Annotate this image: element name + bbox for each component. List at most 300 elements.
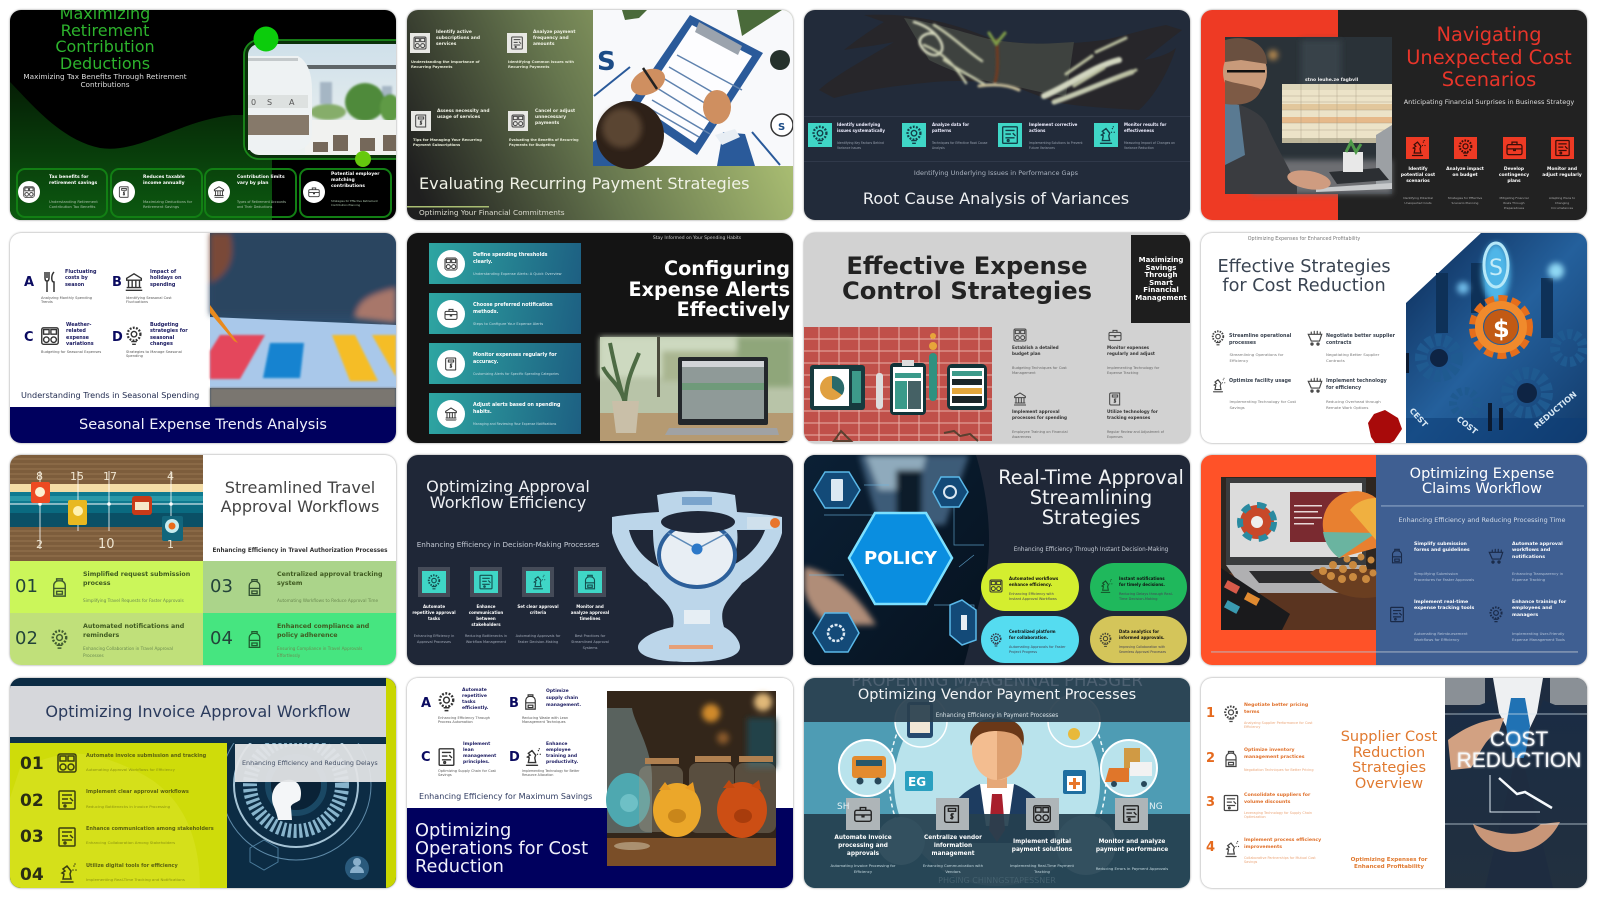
note: Management Techniques — [522, 720, 566, 724]
note — [1244, 811, 1312, 820]
illustration: gears and dollar sign: COST — [1455, 414, 1480, 437]
note — [143, 200, 192, 209]
heading: Adjust alerts based on spending — [473, 402, 560, 408]
icon: gear bulb — [1486, 605, 1506, 624]
subtitle: Enhancing Efficiency and Reducing Delays — [242, 759, 378, 767]
heading — [837, 122, 885, 133]
heading: Centralized approval tracking — [277, 570, 383, 578]
note: Enhancing Communication with — [923, 863, 983, 868]
note — [1499, 196, 1529, 210]
illustration: timeline on wood — [10, 455, 396, 665]
note: Streamlining Operations for — [1230, 352, 1283, 357]
photo: savings jar with coins in green frame — [10, 26, 396, 220]
illustration: trophy with clock — [407, 455, 793, 665]
number 03: 03 — [210, 576, 233, 597]
note — [1512, 631, 1565, 643]
note — [331, 199, 378, 207]
icon: briefcase — [303, 181, 325, 203]
photo: person reviewing clipboard — [407, 10, 793, 208]
letter D: D — [509, 750, 520, 765]
note: Negotiation Techniques for Better Pricing — [1244, 768, 1313, 772]
icon: building — [38, 325, 62, 347]
title: Reduction — [415, 856, 504, 877]
note: Optimizing Supply Chain for Cost — [438, 769, 496, 773]
heading: processes for spending — [1012, 415, 1067, 420]
panel: expense alerts — [407, 233, 793, 443]
title: Overview — [1355, 776, 1423, 792]
icon: briefcase — [1107, 327, 1123, 343]
heading: retirement savings — [49, 181, 97, 186]
note: Simplifying Travel Requests for Faster Approvals — [83, 598, 184, 602]
heading — [546, 742, 578, 766]
heading — [1029, 122, 1078, 133]
cost reduction label: REDUCTION — [1457, 749, 1581, 772]
icon: machine — [1221, 793, 1241, 813]
heading: Automate — [462, 688, 487, 693]
note: Awareness — [1012, 435, 1031, 439]
note — [1119, 592, 1173, 602]
heading: Implement real-time — [1414, 600, 1468, 604]
heading — [924, 834, 982, 858]
title: Optimizing — [415, 820, 511, 841]
heading: seasonal — [150, 335, 174, 341]
note: Management — [1012, 371, 1036, 375]
panel: seasonal expense trends — [10, 233, 396, 443]
heading: Identify active — [436, 30, 472, 35]
note: Variance Reduction — [1124, 146, 1154, 150]
title: Workflow Efficiency — [430, 493, 586, 512]
heading: approvals — [847, 851, 879, 857]
note: Enhancing Transparency in — [1512, 571, 1563, 576]
heading: habits. — [473, 410, 492, 414]
heading: Utilize digital tools for efficiency — [86, 863, 178, 869]
card outline: tax benefits — [16, 168, 108, 218]
heading: Weather- — [66, 322, 91, 328]
note — [1403, 196, 1433, 205]
note — [522, 716, 568, 724]
note: Efficiency — [1230, 358, 1248, 363]
tagline: Savings — [1146, 264, 1176, 272]
title — [1341, 730, 1437, 792]
title: for Cost Reduction — [1222, 276, 1386, 296]
icon: hiking pack — [244, 575, 265, 600]
heading: for timely decisions. — [1119, 582, 1165, 587]
title: Optimizing Invoice Approval Workflow — [45, 702, 351, 721]
heading: Develop — [1504, 167, 1524, 172]
icon: gear bulb — [1209, 328, 1227, 348]
note: Spending — [126, 354, 143, 358]
tagline: Through — [1144, 271, 1178, 279]
note: Automating Workflows to Reduce Approval Time — [277, 598, 378, 602]
illustration: businessman with logistics icons — [804, 678, 1190, 888]
title: Operations for Cost — [415, 838, 588, 859]
title: Expense Alerts — [628, 278, 790, 300]
heading — [1107, 345, 1155, 357]
heading: adjust regularly — [1542, 173, 1582, 178]
note: Identifying Seasonal Cost — [126, 296, 172, 300]
note: Techniques for Effective Root Cause — [932, 140, 987, 144]
note — [1230, 399, 1296, 410]
heading: Centralize vendor — [924, 835, 982, 841]
note: Enhancing Efficiency in — [414, 634, 454, 638]
title: Effective Strategies — [1217, 257, 1391, 277]
panel: operations cost reduction — [407, 678, 793, 888]
illustration: businessman with logistics icons: EG — [908, 775, 926, 789]
illustration: timeline on wood: 4 — [167, 470, 174, 483]
icon: bank — [208, 181, 230, 203]
number 02: 02 — [15, 628, 38, 649]
number 1: 1 — [1206, 706, 1215, 721]
heading: payment solutions — [1012, 847, 1072, 853]
note — [508, 60, 574, 68]
icon: gear bulb — [808, 123, 832, 147]
heading: policy adherence — [277, 632, 338, 638]
note: Understanding Retirement — [49, 200, 98, 204]
heading: Choose preferred notification — [473, 302, 553, 308]
note: Expenses — [1107, 435, 1123, 439]
heading: Reduces taxable — [143, 175, 185, 180]
top note: Optimizing Expenses for Enhanced Profitability — [1248, 237, 1360, 242]
note: Understanding the Importance of — [411, 60, 480, 64]
title: Effective Expense — [846, 252, 1088, 280]
title — [55, 10, 155, 73]
heading: Utilize technology for — [1107, 409, 1158, 414]
heading: employees and — [1512, 606, 1552, 611]
heading — [1244, 702, 1308, 716]
note — [932, 140, 988, 150]
heading — [1326, 378, 1387, 392]
illustration: timeline on wood: 10 — [98, 537, 115, 552]
title — [1217, 258, 1391, 295]
heading: Implement — [463, 742, 490, 747]
photo: savings jar with coins in green frame: S — [267, 98, 272, 107]
heading — [1512, 542, 1563, 562]
panel: supplier cost reduction — [1201, 678, 1587, 888]
note: Payment Subscriptions — [413, 142, 460, 146]
heading — [412, 604, 456, 622]
heading: scenarios — [1406, 179, 1430, 184]
panel: expense control — [804, 233, 1190, 443]
heading: system — [277, 580, 302, 586]
note: Processes — [83, 652, 104, 658]
tagline: Smart — [1149, 278, 1173, 286]
subtitle — [23, 72, 187, 89]
heading — [437, 108, 490, 120]
heading — [143, 174, 185, 186]
note: Future Variances — [1029, 146, 1055, 150]
note: Reducing Overhead through — [1326, 399, 1381, 404]
note: Best Practices for — [575, 634, 605, 638]
heading — [1244, 792, 1310, 806]
title: Claims Workflow — [1422, 480, 1542, 496]
note: Remote Work Options — [1326, 405, 1368, 410]
heading — [83, 570, 190, 588]
note: Enhancing Collaboration Among Stakeholders — [86, 840, 175, 844]
heading: Enhance communication among stakeholders — [86, 826, 214, 832]
letter B: B — [509, 696, 519, 711]
title: Contribution — [55, 37, 155, 56]
icon: approvals — [55, 787, 79, 813]
heading: costs by — [65, 275, 88, 281]
heading: Enhanced compliance and — [277, 622, 369, 630]
title: Navigating — [1436, 23, 1542, 46]
heading: Implement digital — [1013, 839, 1071, 845]
icon: gear cluster — [122, 325, 146, 347]
photo: policy hexagon interface: POLICY — [864, 548, 938, 569]
illustration: gears and dollar sign: REDUCTION — [1533, 390, 1579, 431]
icon: chess — [1221, 839, 1241, 859]
note: Reducing Waste with Lean — [522, 716, 568, 720]
heading: enhance efficiency. — [1009, 582, 1052, 587]
heading: Monitor expenses — [1107, 345, 1149, 350]
note: Steps to Configure Your Expense Alerts — [473, 322, 543, 326]
note: Negotiating Better Supplier — [1326, 352, 1379, 357]
heading: Centralized platform — [1009, 629, 1056, 634]
letter C: C — [24, 330, 34, 345]
note: Evaluating the Benefits of Recurring — [509, 138, 579, 142]
subtitle: Optimizing Your Financial Commitments — [419, 208, 565, 217]
heading: Optimize — [546, 689, 569, 694]
title: Real-Time Approval — [998, 466, 1184, 489]
number 3: 3 — [1206, 795, 1215, 810]
number 01: 01 — [15, 576, 38, 597]
title: Strategies — [1352, 760, 1426, 776]
heading: season — [65, 282, 84, 288]
subtitle: Identifying Underlying Issues in Performance Gaps — [914, 169, 1078, 177]
heading: management — [932, 851, 974, 857]
icon: calculator — [1031, 803, 1053, 825]
heading: Monitor expenses regularly for — [473, 352, 557, 358]
image: brush-shaped plant roots — [804, 14, 1190, 162]
heading: repetitive approval — [412, 610, 456, 615]
heading: communication — [469, 610, 503, 615]
note: Changing — [1555, 201, 1569, 205]
heading: potential cost — [1401, 173, 1435, 178]
heading — [473, 402, 560, 416]
heading: Define spending thresholds — [473, 252, 548, 258]
panel: travel approval workflows — [10, 455, 396, 665]
heading: frequency and — [533, 36, 569, 41]
note: Implementing Technology for Cost — [1230, 399, 1296, 404]
heading: unnecessary — [535, 115, 566, 120]
heading — [1012, 409, 1067, 421]
heading: issues systematically — [837, 128, 885, 133]
illustration: businessman with logistics icons: SH — [837, 802, 849, 812]
note — [1010, 863, 1074, 875]
icon: cart — [1306, 375, 1324, 395]
note: Efficiency — [1244, 725, 1260, 729]
illustration: businessman with logistics icons: PHGING CHINNGSTAPESSNER — [938, 876, 1056, 885]
note: Contribution Planning — [331, 203, 360, 207]
heading: stakeholders — [471, 622, 501, 627]
heading: between — [476, 616, 496, 621]
tagline — [1135, 257, 1187, 302]
note — [1029, 140, 1083, 150]
icon: backpack — [1387, 547, 1407, 565]
icon: bank — [437, 400, 465, 428]
icon: chess — [1209, 375, 1227, 395]
cost reduction label — [1457, 729, 1581, 771]
top note: Stay Informed on Your Spending Habits — [653, 236, 741, 241]
heading: Optimize inventory — [1244, 748, 1295, 752]
heading: Streamline operational — [1229, 334, 1291, 338]
heading: Monitor results for — [1124, 122, 1166, 127]
note: Customizing Alerts for Specific Spending Categories — [473, 372, 559, 376]
heading: regularly and adjust — [1107, 351, 1155, 356]
icon: board — [55, 860, 79, 886]
alert band 1 — [429, 243, 581, 284]
icon: shirt form — [1387, 605, 1407, 624]
panel: real-time approval — [804, 455, 1190, 665]
note — [1414, 571, 1474, 583]
illustration: budget dashboard on red grid — [804, 233, 1190, 443]
title: Seasonal Expense Trends Analysis — [79, 417, 327, 433]
title — [842, 254, 1092, 304]
title — [998, 468, 1184, 528]
heading: payments — [535, 121, 559, 126]
icon: book — [941, 803, 963, 825]
tagline: Financial — [1143, 286, 1179, 294]
note: Enhancing Efficiency with — [1009, 592, 1054, 596]
heading — [517, 604, 559, 616]
heading — [1009, 576, 1058, 588]
note: Reducing Bottlenecks in — [465, 634, 507, 638]
note — [1414, 631, 1468, 643]
heading: improvements — [1244, 844, 1282, 850]
heading: analyze approval — [571, 610, 609, 615]
heading: plans — [1507, 179, 1521, 184]
heading: process — [83, 580, 110, 586]
subtitle: Enhancing Efficiency Through Instant Decision-Making — [1014, 547, 1168, 553]
note — [837, 140, 884, 150]
note: Adapting Plans to — [1549, 196, 1575, 200]
letter C: C — [421, 750, 431, 765]
panel: invoice approval workflow — [10, 678, 396, 888]
icon: fork and knife — [43, 271, 59, 293]
note: Recurring Payments — [508, 64, 549, 68]
photo: laptop with plant by window — [407, 233, 793, 443]
heading — [1499, 166, 1529, 184]
heading: budget plan — [1012, 351, 1041, 356]
heading: expense tracking tools — [1414, 606, 1474, 611]
note: Budgeting for Seasonal Expenses — [41, 350, 101, 354]
title — [426, 478, 590, 512]
heading: managers — [1512, 613, 1538, 618]
icon: calendar — [988, 577, 1004, 595]
note: Risks Through — [1503, 201, 1525, 205]
heading: Potential employer — [331, 172, 379, 177]
heading: contracts — [1326, 340, 1351, 346]
icon: cash — [508, 111, 528, 131]
alert band 2 — [429, 293, 581, 334]
heading: information — [934, 843, 972, 849]
icon: phone — [411, 111, 431, 131]
note — [516, 633, 560, 645]
heading: Impact of — [150, 269, 176, 275]
title — [1410, 466, 1554, 496]
heading — [331, 172, 380, 189]
heading — [1414, 600, 1474, 613]
heading: strategies for — [150, 328, 188, 334]
note: Analyzing Monthly Spending — [41, 296, 92, 300]
heading: Instant notifications — [1119, 576, 1165, 581]
heading: amounts — [533, 42, 555, 47]
heading — [150, 269, 182, 288]
heading: contributions — [331, 184, 365, 189]
note: Approval Processes — [417, 640, 451, 644]
note: Process Automation — [438, 720, 473, 724]
title: Effectively — [677, 298, 790, 321]
title — [1406, 23, 1572, 91]
illustration: timeline on wood: 15 — [70, 470, 84, 483]
heading: matching — [331, 178, 355, 183]
title: Scenarios — [1442, 68, 1536, 91]
heading — [1096, 838, 1168, 854]
note — [83, 644, 173, 658]
note — [1012, 366, 1067, 376]
note — [465, 633, 507, 645]
heading — [834, 834, 892, 858]
note: Implementing Technology for Better — [522, 769, 579, 773]
number 03: 03 — [20, 827, 44, 847]
title: Supplier Cost — [1341, 729, 1437, 745]
heading — [1009, 629, 1056, 641]
note: Instant Approval Workflows — [1009, 597, 1057, 601]
heading: informed approvals. — [1119, 635, 1165, 640]
letter A: A — [24, 275, 34, 290]
note: Enhancing Efficiency Through — [438, 716, 490, 720]
heading: Consolidate suppliers for — [1244, 792, 1310, 798]
number 04: 04 — [210, 628, 233, 649]
note: Variance Issues — [837, 146, 861, 150]
note — [413, 138, 482, 146]
panel: expense claims workflow — [1201, 455, 1587, 665]
heading: actions — [1029, 128, 1045, 133]
icon: calculator — [437, 250, 465, 278]
note: Expense Tracking — [1107, 371, 1138, 375]
heading — [462, 688, 488, 712]
note — [831, 863, 895, 875]
note: Identifying Common Issues with — [508, 60, 574, 64]
heading — [1107, 409, 1158, 421]
note: Reducing Delays through Real- — [1119, 592, 1173, 596]
heading: for collaboration. — [1009, 635, 1048, 640]
tagline: Management — [1135, 294, 1187, 302]
heading: training and — [546, 754, 577, 759]
icon: cart — [1306, 328, 1324, 348]
heading: tracking expenses — [1107, 415, 1150, 420]
note: Improving Collaboration with — [1119, 644, 1165, 648]
heading: Implement approval — [1012, 409, 1060, 414]
icon: storefront — [122, 271, 146, 293]
heading: forms and guidelines — [1414, 548, 1470, 553]
heading: Establish a detailed — [1012, 345, 1059, 350]
heading: Set clear approval — [517, 604, 559, 609]
heading: notifications — [1512, 555, 1545, 560]
icon: payment list — [507, 33, 527, 53]
icon: chess — [1097, 577, 1114, 595]
note: Preparedness — [1504, 206, 1524, 210]
note — [1119, 644, 1166, 655]
photo: analyst with spreadsheet and laptop — [1223, 35, 1396, 198]
heading: tasks — [428, 616, 440, 621]
illustration: digital rings and head silhouette — [10, 678, 396, 888]
note — [1448, 196, 1482, 205]
heading: timelines — [580, 616, 600, 621]
number 4: 4 — [1206, 840, 1215, 855]
note — [1124, 140, 1175, 150]
title — [628, 259, 790, 320]
